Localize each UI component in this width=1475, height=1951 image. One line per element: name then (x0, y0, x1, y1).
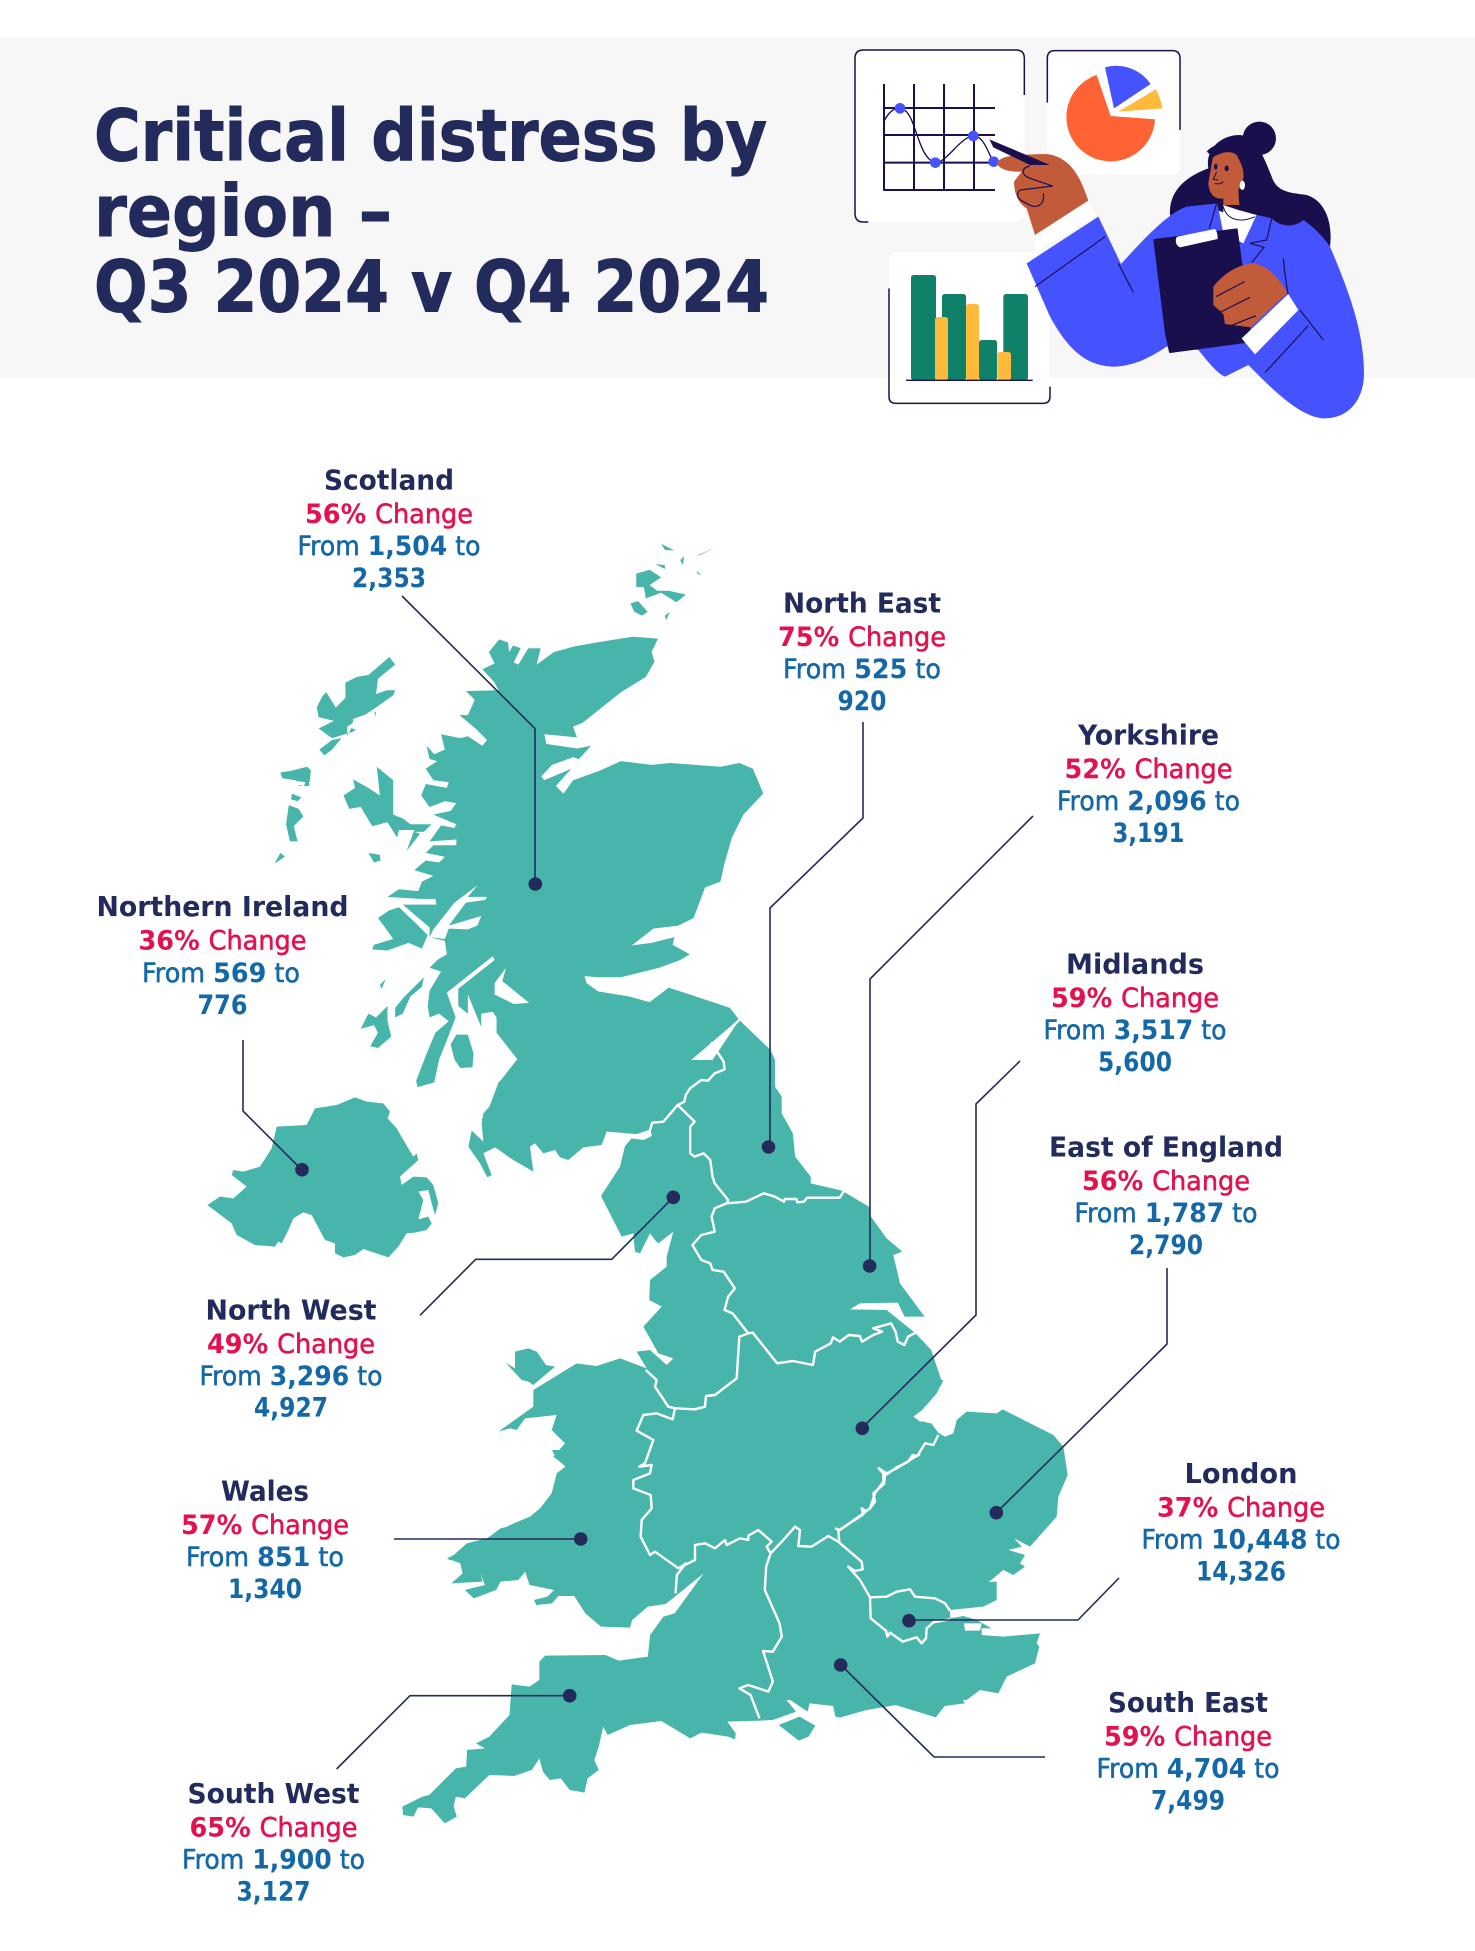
label: Midlands: From 3,517 to (1044, 1015, 1226, 1046)
label: North East: From 525 to (783, 654, 941, 685)
label: North West (200, 1293, 382, 1424)
title (94, 94, 769, 328)
label: North East (778, 586, 946, 717)
label: South West: 65% Change (190, 1812, 358, 1844)
label: South East: From 4,704 to (1096, 1754, 1280, 1784)
woman figure (989, 122, 1364, 418)
label: East of England: 2,790 (1129, 1230, 1203, 1261)
label: North West: North West (206, 1293, 376, 1326)
region: Northern Ireland (207, 1097, 438, 1257)
map of the UK (207, 544, 1068, 1823)
label: East of England: East of England (1049, 1130, 1283, 1164)
region: Scotland and islands (275, 544, 763, 1120)
label: Wales: 1,340 (228, 1574, 302, 1605)
label: East of England: From 1,787 to (1074, 1198, 1258, 1229)
label: Scotland: 2,353 (352, 563, 426, 594)
region: southern Scotland, north-west England, north Wales (448, 1060, 720, 1560)
label: South East: South East (1108, 1686, 1268, 1719)
label: London (1142, 1457, 1340, 1588)
label: North East: North East (783, 586, 941, 620)
label: North West: 49% Change (207, 1329, 375, 1360)
header band (0, 37, 1475, 378)
label: South West: South West (188, 1777, 360, 1810)
Anglesey (506, 1348, 555, 1385)
label: Northern Ireland: 36% Change (138, 926, 306, 956)
label: Midlands: 5,600 (1098, 1047, 1172, 1078)
label: Scotland (298, 464, 480, 594)
label: London: 14,326 (1196, 1556, 1286, 1588)
Isle of Wight (779, 1717, 815, 1741)
sea inlets (296, 711, 529, 1004)
region: north-east England and Yorkshire coast (677, 1020, 949, 1500)
label: Northern Ireland: Northern Ireland (96, 890, 348, 923)
label: South West (182, 1777, 365, 1908)
label: North East: 920 (838, 686, 886, 717)
label: Scotland: 56% Change (305, 499, 473, 530)
label: Yorkshire: 3,191 (1112, 818, 1184, 849)
label: Northern Ireland: From 569 to (142, 958, 300, 989)
label: Yorkshire (1057, 718, 1240, 849)
illustration: analyst with charts (855, 49, 1364, 418)
label: London: From 10,448 to (1142, 1524, 1340, 1556)
title: Critical distress by (94, 94, 767, 178)
label: Scotland: Scotland (324, 464, 454, 496)
label: North West: From 3,296 to (200, 1361, 382, 1392)
label: Yorkshire: Yorkshire (1077, 718, 1219, 752)
label: Midlands (1044, 948, 1226, 1078)
label: Northern Ireland (96, 890, 348, 1021)
leader lines (243, 596, 1167, 1769)
bar chart card (889, 252, 1050, 403)
label: Wales: 57% Change (181, 1510, 349, 1541)
line chart card (855, 49, 1024, 222)
label: North East: 75% Change (778, 622, 946, 653)
title: region – (94, 170, 392, 253)
title: Q3 2024 v Q4 2024 (94, 246, 769, 328)
label: South West: 3,127 (236, 1876, 310, 1908)
label: Wales: Wales (221, 1475, 309, 1508)
label: London: London (1184, 1457, 1298, 1490)
label: South East (1096, 1686, 1280, 1816)
label: Yorkshire: 52% Change (1064, 754, 1232, 785)
label: East of England (1049, 1130, 1283, 1261)
label: South East: 59% Change (1104, 1722, 1272, 1752)
label: Wales (181, 1475, 349, 1605)
label: East of England: 56% Change (1082, 1166, 1250, 1197)
regional boundaries (633, 1020, 950, 1718)
label: Midlands: 59% Change (1051, 983, 1219, 1014)
label: Midlands: Midlands (1066, 948, 1204, 980)
label: Scotland: From 1,504 to (298, 531, 480, 562)
pie chart card (1047, 51, 1180, 175)
label: South East: 7,499 (1151, 1786, 1225, 1816)
label: Wales: From 851 to (186, 1542, 344, 1573)
label: North West: 4,927 (254, 1393, 328, 1424)
region: south Wales and south of England (402, 1450, 965, 1823)
Lincolnshire edge (847, 1380, 943, 1480)
region markers (295, 877, 1003, 1702)
region: East Anglia, Essex and Kent (780, 1380, 1068, 1700)
Thames Sheppey gap (964, 1623, 982, 1631)
label: London: 37% Change (1157, 1492, 1325, 1524)
label: Northern Ireland: 776 (198, 990, 248, 1021)
label: South West: From 1,900 to (182, 1844, 365, 1876)
label: Yorkshire: From 2,096 to (1057, 786, 1240, 817)
